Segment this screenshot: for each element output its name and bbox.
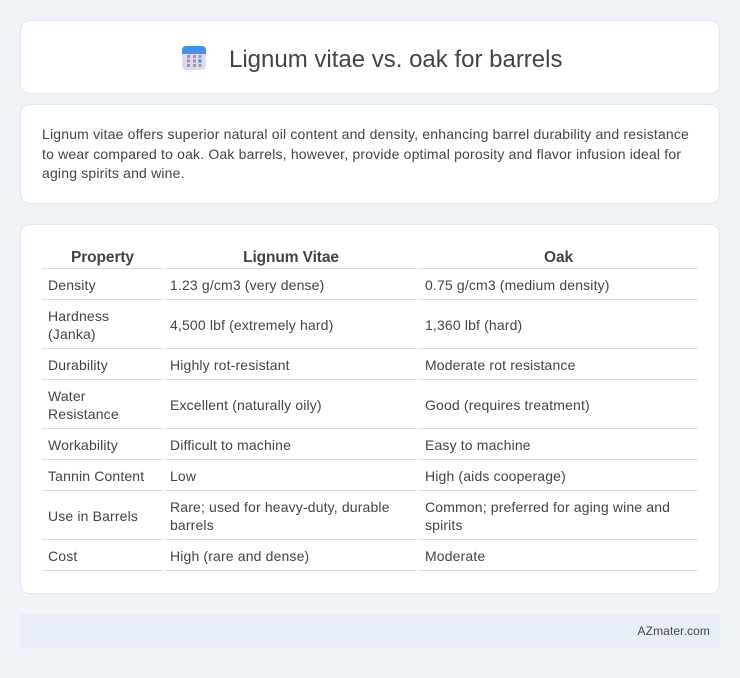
intro text [42,126,689,181]
table rows: High (rare and dense) [170,548,309,564]
table rows: barrels [170,517,214,533]
icon: calendar [182,46,206,70]
comparison table [42,249,698,571]
table rows: Common; preferred for aging wine and [425,499,670,515]
table rows: Resistance [48,406,119,422]
table rows: Low [170,468,196,484]
table rows: 4,500 lbf (extremely hard) [170,317,333,333]
table rows: Easy to machine [425,437,531,453]
footer credit: AZmater.com [638,624,710,638]
title: Lignum vitae vs. oak for barrels [229,46,562,73]
table rows: Cost [48,548,77,564]
column headers: Oak [544,249,573,266]
table rows: (Janka) [48,326,96,342]
intro text: Lignum vitae offers superior natural oil content and density, enhancing barrel durability and resistance [42,126,689,142]
column headers: Property [71,249,134,266]
table rows: Moderate rot resistance [425,357,576,373]
table rows: Tannin Content [48,468,144,484]
intro text: to wear compared to oak. Oak barrels, however, provide optimal porosity and flavor infusion ideal for [42,146,681,162]
column headers: Lignum Vitae [243,249,339,266]
table rows: Good (requires treatment) [425,397,590,413]
table card [20,224,720,594]
table rows: 1.23 g/cm3 (very dense) [170,277,324,293]
table rows: Durability [48,357,108,373]
table rows: High (aids cooperage) [425,468,566,484]
title card [20,20,720,94]
footer bar [20,614,720,648]
table rows: Use in Barrels [48,508,138,524]
table rows: spirits [425,517,463,533]
table rows: 1,360 lbf (hard) [425,317,522,333]
table rows: Highly rot-resistant [170,357,290,373]
table rows: Water [48,388,86,404]
table rows: 0.75 g/cm3 (medium density) [425,277,610,293]
table rows: Hardness [48,308,109,324]
table rows: Density [48,277,96,293]
table rows: Rare; used for heavy-duty, durable [170,499,390,515]
table rows: Excellent (naturally oily) [170,397,322,413]
intro card [20,104,720,204]
column headers [71,249,574,266]
table rows: Moderate [425,548,485,564]
table rows: Difficult to machine [170,437,291,453]
table rows: Workability [48,437,118,453]
intro text: aging spirits and wine. [42,165,185,181]
